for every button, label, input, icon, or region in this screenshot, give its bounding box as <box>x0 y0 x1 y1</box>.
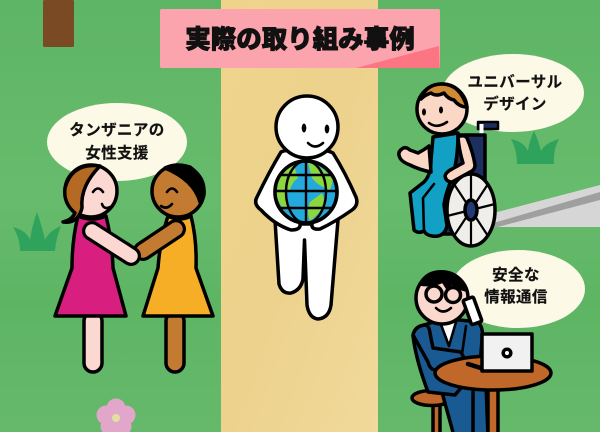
bubble text: communications: 情報通信 <box>484 287 548 306</box>
legs <box>275 220 338 319</box>
icon: grass tuft right <box>511 131 559 164</box>
shirt <box>440 322 456 346</box>
bubble text: ユニバーサル <box>467 73 563 91</box>
table <box>435 356 551 432</box>
eyes <box>422 108 426 116</box>
ramp <box>490 185 600 229</box>
speech bubble: universal design <box>442 54 584 132</box>
head <box>152 165 204 217</box>
background: sand path <box>221 0 378 432</box>
bubble text: design: デザイン <box>483 94 547 113</box>
mouth <box>102 204 110 208</box>
tree trunk <box>43 0 74 47</box>
arm: yellow dress woman <box>143 229 176 251</box>
figure: woman in yellow dress <box>143 165 213 372</box>
mouth <box>161 204 172 208</box>
body and legs <box>410 133 458 236</box>
head <box>276 96 338 158</box>
leg <box>166 312 184 372</box>
laptop <box>482 334 532 371</box>
icon: pink flower <box>96 398 136 432</box>
globe <box>275 161 337 223</box>
mouth <box>308 143 323 146</box>
sleeve <box>413 325 468 370</box>
chair back <box>440 135 485 234</box>
wheel <box>447 174 495 246</box>
speech bubble: secure communications <box>451 250 585 328</box>
arm: pink dress woman <box>92 231 131 256</box>
arms and torso <box>256 150 357 230</box>
mouth <box>436 308 451 312</box>
jacket <box>413 320 482 395</box>
phone <box>463 297 482 325</box>
hair <box>165 165 204 202</box>
eyes <box>302 124 306 132</box>
dress <box>143 216 213 316</box>
right arm <box>445 136 475 182</box>
title banner <box>160 9 440 68</box>
head <box>65 165 117 217</box>
stool <box>412 390 452 432</box>
bubble text: women's support: 女性支援 <box>85 143 149 162</box>
head <box>417 84 467 134</box>
speech bubble: Tanzania <box>47 103 187 181</box>
trousers <box>440 385 488 432</box>
eye <box>167 188 177 192</box>
wheelchair handle <box>478 122 498 134</box>
left arm <box>399 146 431 172</box>
bubble text: タンザニアの <box>69 121 165 139</box>
head <box>416 272 468 324</box>
figure: person in wheelchair <box>399 84 495 246</box>
figure: white person holding globe <box>256 96 357 319</box>
hair <box>420 272 466 292</box>
hair <box>63 165 100 222</box>
dress <box>55 216 126 316</box>
figure: man with phone and laptop <box>413 272 488 432</box>
eye <box>93 188 103 192</box>
icon: grass tuft left <box>13 212 61 251</box>
figure: woman in pink dress <box>55 165 126 372</box>
glasses <box>426 286 460 302</box>
mouth <box>429 122 447 126</box>
leg <box>84 312 102 372</box>
bubble text: 安全な <box>492 265 540 284</box>
title text: 実際の取り組み事例 <box>185 26 415 54</box>
hair <box>421 84 467 107</box>
